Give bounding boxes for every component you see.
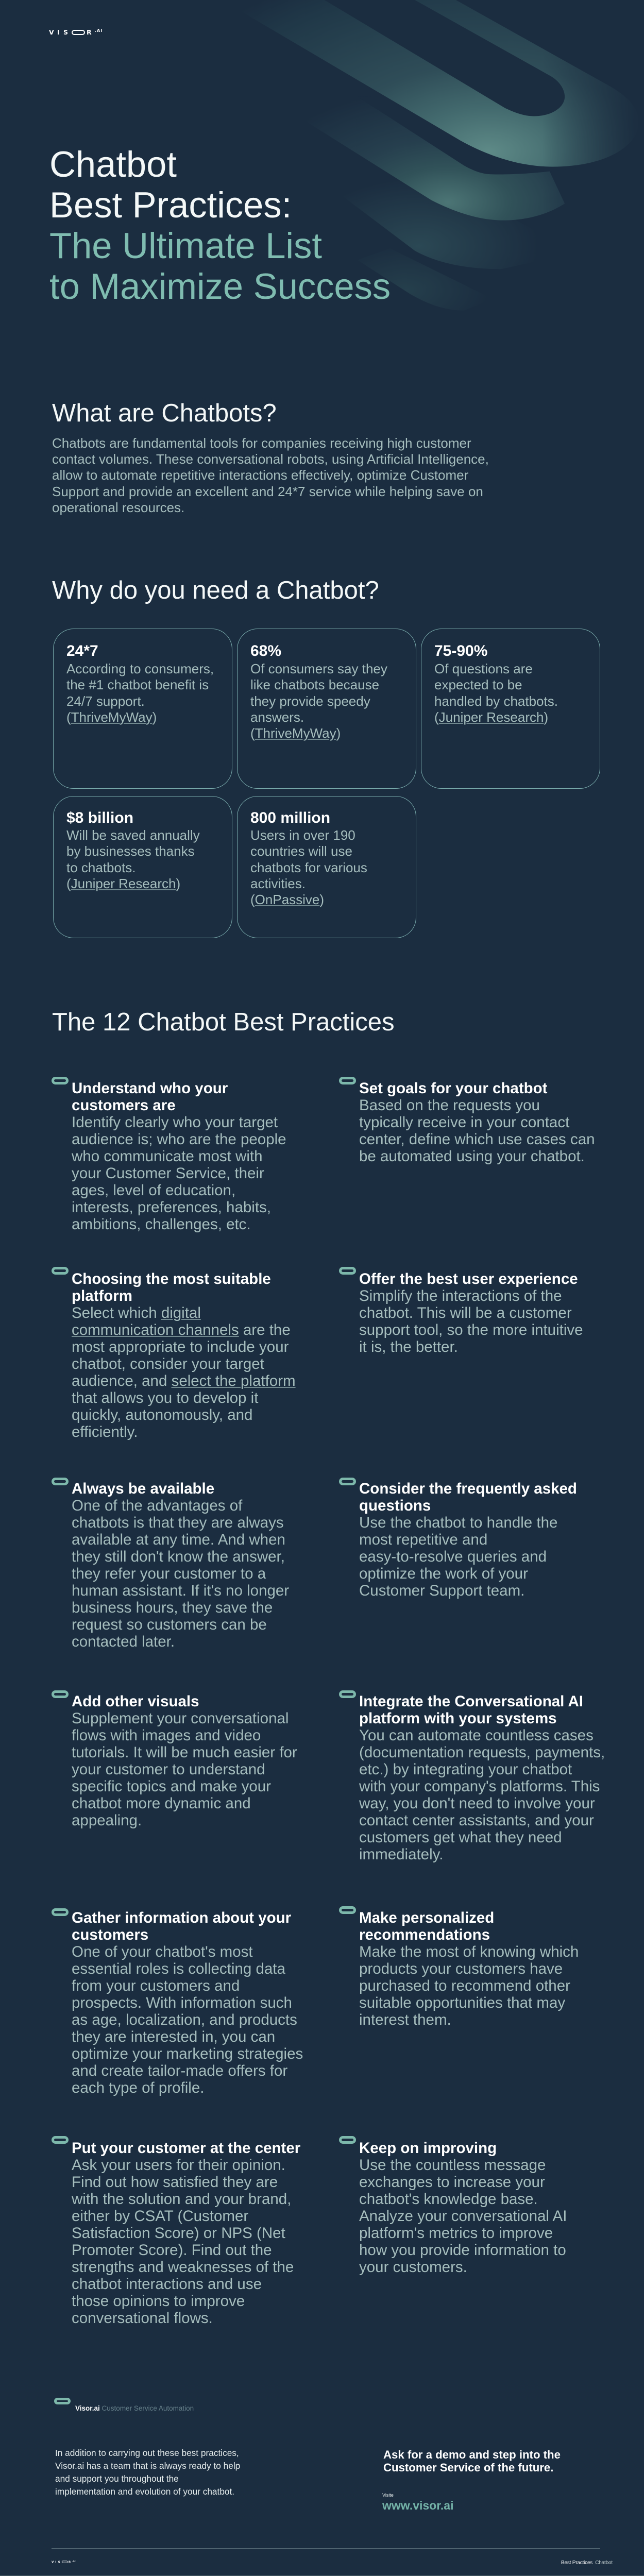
practice 1 <box>52 1077 286 1233</box>
practice 10 <box>339 1906 579 2028</box>
practice 10: purchased to recommend other <box>359 1977 570 1994</box>
stat card: $8 billion: $8 billion <box>66 809 133 826</box>
practice 6: Customer Support team. <box>359 1582 524 1599</box>
practice 11: those opinions to improve <box>72 2293 245 2310</box>
stat card: $8 billion: by businesses thanks <box>66 843 195 859</box>
practice 9: and create tailor-made offers for <box>72 2062 287 2079</box>
stat card: 75-90%: Of questions are <box>434 661 533 676</box>
practice 5: One of the advantages of <box>72 1497 242 1514</box>
practice 4 <box>339 1267 583 1355</box>
title <box>49 144 391 307</box>
practice 7: appealing. <box>72 1812 142 1829</box>
practice 9: Gather information about your <box>72 1909 291 1926</box>
practice 9: from your customers and <box>72 1977 240 1994</box>
practice 11: strengths and weaknesses of the <box>72 2259 294 2276</box>
practice 9: they are interested in, you can <box>72 2028 275 2045</box>
stat card: 24*7: the #1 chatbot benefit is <box>66 677 209 692</box>
practice 5: business hours, they save the <box>72 1599 273 1616</box>
practice 12: Use the countless message <box>359 2157 546 2174</box>
practice 11: conversational flows. <box>72 2310 213 2327</box>
practice 5: contacted later. <box>72 1633 175 1650</box>
stat card: 68%: like chatbots because <box>250 677 379 692</box>
practice 12: exchanges to increase your <box>359 2174 545 2191</box>
practice 9: customers <box>72 1926 148 1943</box>
practice 3: audience, and select the platform <box>72 1372 296 1389</box>
practice 3: platform <box>72 1287 132 1304</box>
practice 10: Make personalized <box>359 1909 494 1926</box>
practice 12: platform's metrics to improve <box>359 2225 553 2242</box>
practice 10: recommendations <box>359 1926 490 1943</box>
logo: Visor.ai footer: V <box>52 2560 54 2564</box>
practice 7: Supplement your conversational <box>72 1710 289 1727</box>
practice 1: your Customer Service, their <box>72 1165 264 1182</box>
practice 5: request so customers can be <box>72 1616 267 1633</box>
practice 8: Integrate the Conversational AI <box>359 1693 583 1710</box>
footer paragraph <box>55 2448 240 2497</box>
practice 8: customers get what they need <box>359 1829 562 1846</box>
practice 2: Set goals for your chatbot <box>359 1080 548 1097</box>
logo: Visor.ai header <box>49 28 103 36</box>
practice 10: suitable opportunities that may <box>359 1994 565 2011</box>
practice 10: interest them. <box>359 2011 451 2028</box>
practice 6: questions <box>359 1497 431 1514</box>
practice 11: with the solution and your brand, <box>72 2191 291 2208</box>
practice 4: support tool, so the more intuitive <box>359 1321 583 1338</box>
stat card: $8 billion: to chatbots. <box>66 860 135 875</box>
practice 8 <box>339 1690 605 1863</box>
practice 2 <box>339 1077 595 1165</box>
footer paragraph: In addition to carrying out these best practices, <box>55 2448 239 2458</box>
practice 9: optimize your marketing strategies <box>72 2045 303 2062</box>
practice 11 <box>52 2136 300 2327</box>
stat card: 24*7: 24/7 support. <box>66 693 145 709</box>
practice 7: flows with images and video <box>72 1727 261 1744</box>
title: The Ultimate List <box>49 225 322 266</box>
icon: footer pill <box>54 2398 71 2404</box>
intro paragraph: Chatbots are fundamental tools for companies receiving high customer <box>52 435 471 451</box>
logo: Visor.ai header: S <box>63 28 68 36</box>
practice 5: they refer your customer to a <box>72 1565 266 1582</box>
call to action: Customer Service of the future. <box>383 2461 553 2474</box>
logo: Visor.ai footer: .AI <box>72 2560 76 2562</box>
practice 7: chatbot more dynamic and <box>72 1795 251 1812</box>
practice 7: Add other visuals <box>72 1693 199 1710</box>
logo: Visor.ai header: V <box>49 28 54 36</box>
practice 1: Understand who your <box>72 1080 228 1097</box>
practice 7: tutorials. It will be much easier for <box>72 1744 297 1761</box>
practice 1: who communicate most with <box>72 1148 263 1165</box>
title: Chatbot <box>49 144 177 184</box>
practice 6: optimize the work of your <box>359 1565 528 1582</box>
practice 1: ambitions, challenges, etc. <box>72 1216 251 1233</box>
practice 8: with your company's platforms. This <box>359 1778 600 1795</box>
intro paragraph: contact volumes. These conversational robots, using Artificial Intelligence, <box>52 451 489 467</box>
practice 6 <box>339 1478 577 1599</box>
bottom edge line <box>0 2575 644 2576</box>
practice 3: Choosing the most suitable <box>72 1270 271 1287</box>
stat card: 24*7 <box>53 629 232 789</box>
practice 7 <box>52 1690 297 1829</box>
stat card: 800 million: 800 million <box>250 809 330 826</box>
practice 11: Promoter Score). Find out the <box>72 2242 272 2259</box>
practice 12 <box>339 2136 567 2276</box>
practice 11: chatbot interactions and use <box>72 2276 262 2293</box>
practice 9: each type of profile. <box>72 2079 204 2096</box>
footer paragraph: implementation and evolution of your chatbot. <box>55 2486 234 2497</box>
intro paragraph: Support and provide an excellent and 24*7 service while helping save on <box>52 484 483 499</box>
stat card: $8 billion: Will be saved annually <box>66 827 200 843</box>
title: to Maximize Success <box>49 266 391 307</box>
practice 1: audience is; who are the people <box>72 1131 286 1148</box>
call to action <box>383 2448 561 2474</box>
stat card: 24*7: (ThriveMyWay) <box>66 709 157 725</box>
practice 1: ages, level of education, <box>72 1182 235 1199</box>
footer paragraph: Visor.ai has a team that is always ready to help <box>55 2461 240 2471</box>
practice 11: Satisfaction Score) or NPS (Net <box>72 2225 285 2242</box>
practice 8: (documentation requests, payments, <box>359 1744 605 1761</box>
stat card: 75-90%: expected to be <box>434 677 522 692</box>
practice 5: human assistant. If it's no longer <box>72 1582 289 1599</box>
logo: Visor.ai footer <box>52 2560 76 2564</box>
stat card: 68% <box>237 629 416 789</box>
stat card: 800 million: countries will use <box>250 843 352 859</box>
practice 8: contact center assistants, and your <box>359 1812 594 1829</box>
stat card: 68%: 68% <box>250 642 281 659</box>
stat card: 75-90% <box>421 629 600 789</box>
stat card: 24*7: According to consumers, <box>66 661 214 676</box>
practice 5: they still don't know the answer, <box>72 1548 285 1565</box>
practice 3: quickly, autonomously, and <box>72 1406 252 1423</box>
practice 6: Consider the frequently asked <box>359 1480 577 1497</box>
practice 5: chatbots is that they are always <box>72 1514 284 1531</box>
practice 5: available at any time. And when <box>72 1531 285 1548</box>
practice 6: most repetitive and <box>359 1531 487 1548</box>
logo: Visor.ai header: I <box>57 28 60 36</box>
practice 9 <box>52 1908 303 2096</box>
practice 4: it is, the better. <box>359 1338 458 1355</box>
stat card: 68%: they provide speedy <box>250 693 370 709</box>
practice 2: typically receive in your contact <box>359 1114 569 1131</box>
footer tagline: Visor.ai Customer Service Automation <box>75 2404 194 2412</box>
logo: Visor.ai footer: S <box>58 2560 60 2564</box>
practice 7: specific topics and make your <box>72 1778 271 1795</box>
stat card: 75-90%: 75-90% <box>434 642 487 659</box>
stat card: 68%: (ThriveMyWay) <box>250 725 341 741</box>
footer label: Best Practices Chatbot <box>561 2560 613 2566</box>
practice 3: efficiently. <box>72 1423 138 1440</box>
practice 11: Find out how satisfied they are <box>72 2174 278 2191</box>
intro paragraph: operational resources. <box>52 500 184 515</box>
practice 12: Analyze your conversational AI <box>359 2208 567 2225</box>
logo: Visor.ai header: .AI <box>95 28 103 33</box>
practice 8: platform with your systems <box>359 1710 557 1727</box>
practice 1: Identify clearly who your target <box>72 1114 278 1131</box>
practice 11: Put your customer at the center <box>72 2140 300 2157</box>
footer divider <box>52 2548 600 2549</box>
stat card: $8 billion: (Juniper Research) <box>66 876 180 891</box>
practice 11: either by CSAT (Customer <box>72 2208 248 2225</box>
practice 4: Offer the best user experience <box>359 1270 578 1287</box>
practice 3 <box>52 1267 296 1440</box>
intro paragraph <box>52 435 489 515</box>
logo: Visor.ai header: R <box>87 28 92 36</box>
practice 10: products your customers have <box>359 1960 563 1977</box>
practice 3: communication channels are the <box>72 1321 291 1338</box>
practice 9: One of your chatbot's most <box>72 1943 253 1960</box>
practice 3: chatbot, consider your target <box>72 1355 264 1372</box>
practice 12: Keep on improving <box>359 2140 497 2157</box>
logo: Visor.ai footer: R <box>69 2560 71 2564</box>
stat card: 800 million: activities. <box>250 876 306 891</box>
call to action: Ask for a demo and step into the <box>383 2448 561 2461</box>
practice 2: be automated using your chatbot. <box>359 1148 585 1165</box>
practice 2: Based on the requests you <box>359 1097 540 1114</box>
intro paragraph: allow to automate repetitive interactions effectively, optimize Customer <box>52 467 468 483</box>
practice 7: your customer to understand <box>72 1761 265 1778</box>
heading: The 12 Chatbot Best Practices: The 12 Chatbot Best Practices <box>52 1008 395 1036</box>
stat card: 800 million: (OnPassive) <box>250 892 324 907</box>
practice 5: Always be available <box>72 1480 214 1497</box>
practice 4: chatbot. This will be a customer <box>359 1304 572 1321</box>
logo: Visor.ai footer: I <box>55 2560 56 2564</box>
title: Best Practices: <box>49 184 292 225</box>
practice 8: etc.) by integrating your chatbot <box>359 1761 572 1778</box>
practice 9: as age, localization, and products <box>72 2011 297 2028</box>
practice 5 <box>52 1478 289 1650</box>
practice 12: your customers. <box>359 2259 467 2276</box>
stat card: 68%: Of consumers say they <box>250 661 387 676</box>
background swooshes <box>268 0 620 307</box>
practice 2: center, define which use cases can <box>359 1131 595 1148</box>
heading: Why do you need a Chatbot?: Why do you need a Chatbot? <box>52 577 379 604</box>
practice 8: way, you don't need to involve your <box>359 1795 595 1812</box>
practice 1: customers are <box>72 1097 176 1114</box>
practice 9: prospects. With information such <box>72 1994 292 2011</box>
practice 8: You can automate countless cases <box>359 1727 594 1744</box>
practice 11: Ask your users for their opinion. <box>72 2157 285 2174</box>
stat card: $8 billion <box>53 796 232 938</box>
practice 6: Use the chatbot to handle the <box>359 1514 557 1531</box>
practice 3: Select which digital <box>72 1304 201 1321</box>
practice 12: chatbot's knowledge base. <box>359 2191 538 2208</box>
stat card: 75-90%: (Juniper Research) <box>434 709 548 725</box>
website link: www.visor.ai <box>382 2499 453 2512</box>
practice 8: immediately. <box>359 1846 443 1863</box>
footer paragraph: and support you throughout the <box>55 2473 179 2484</box>
practice 3: that allows you to develop it <box>72 1389 258 1406</box>
practice 1: interests, preferences, habits, <box>72 1199 271 1216</box>
stat card: 75-90%: handled by chatbots. <box>434 693 558 709</box>
practice 12: how you provide information to <box>359 2242 566 2259</box>
practice 4: Simplify the interactions of the <box>359 1287 562 1304</box>
stat card: 24*7: 24*7 <box>66 642 98 659</box>
practice 3: most appropriate to include your <box>72 1338 289 1355</box>
visit label: Visite <box>382 2493 394 2498</box>
practice 6: easy-to-resolve queries and <box>359 1548 547 1565</box>
practice 10: Make the most of knowing which <box>359 1943 579 1960</box>
stat card: 800 million: chatbots for various <box>250 860 367 875</box>
stat card: 800 million: Users in over 190 <box>250 827 355 843</box>
practice 9: essential roles is collecting data <box>72 1960 285 1977</box>
stat card: 68%: answers. <box>250 709 304 725</box>
heading: What are Chatbots?: What are Chatbots? <box>52 399 277 427</box>
stat card: 800 million <box>237 796 416 938</box>
